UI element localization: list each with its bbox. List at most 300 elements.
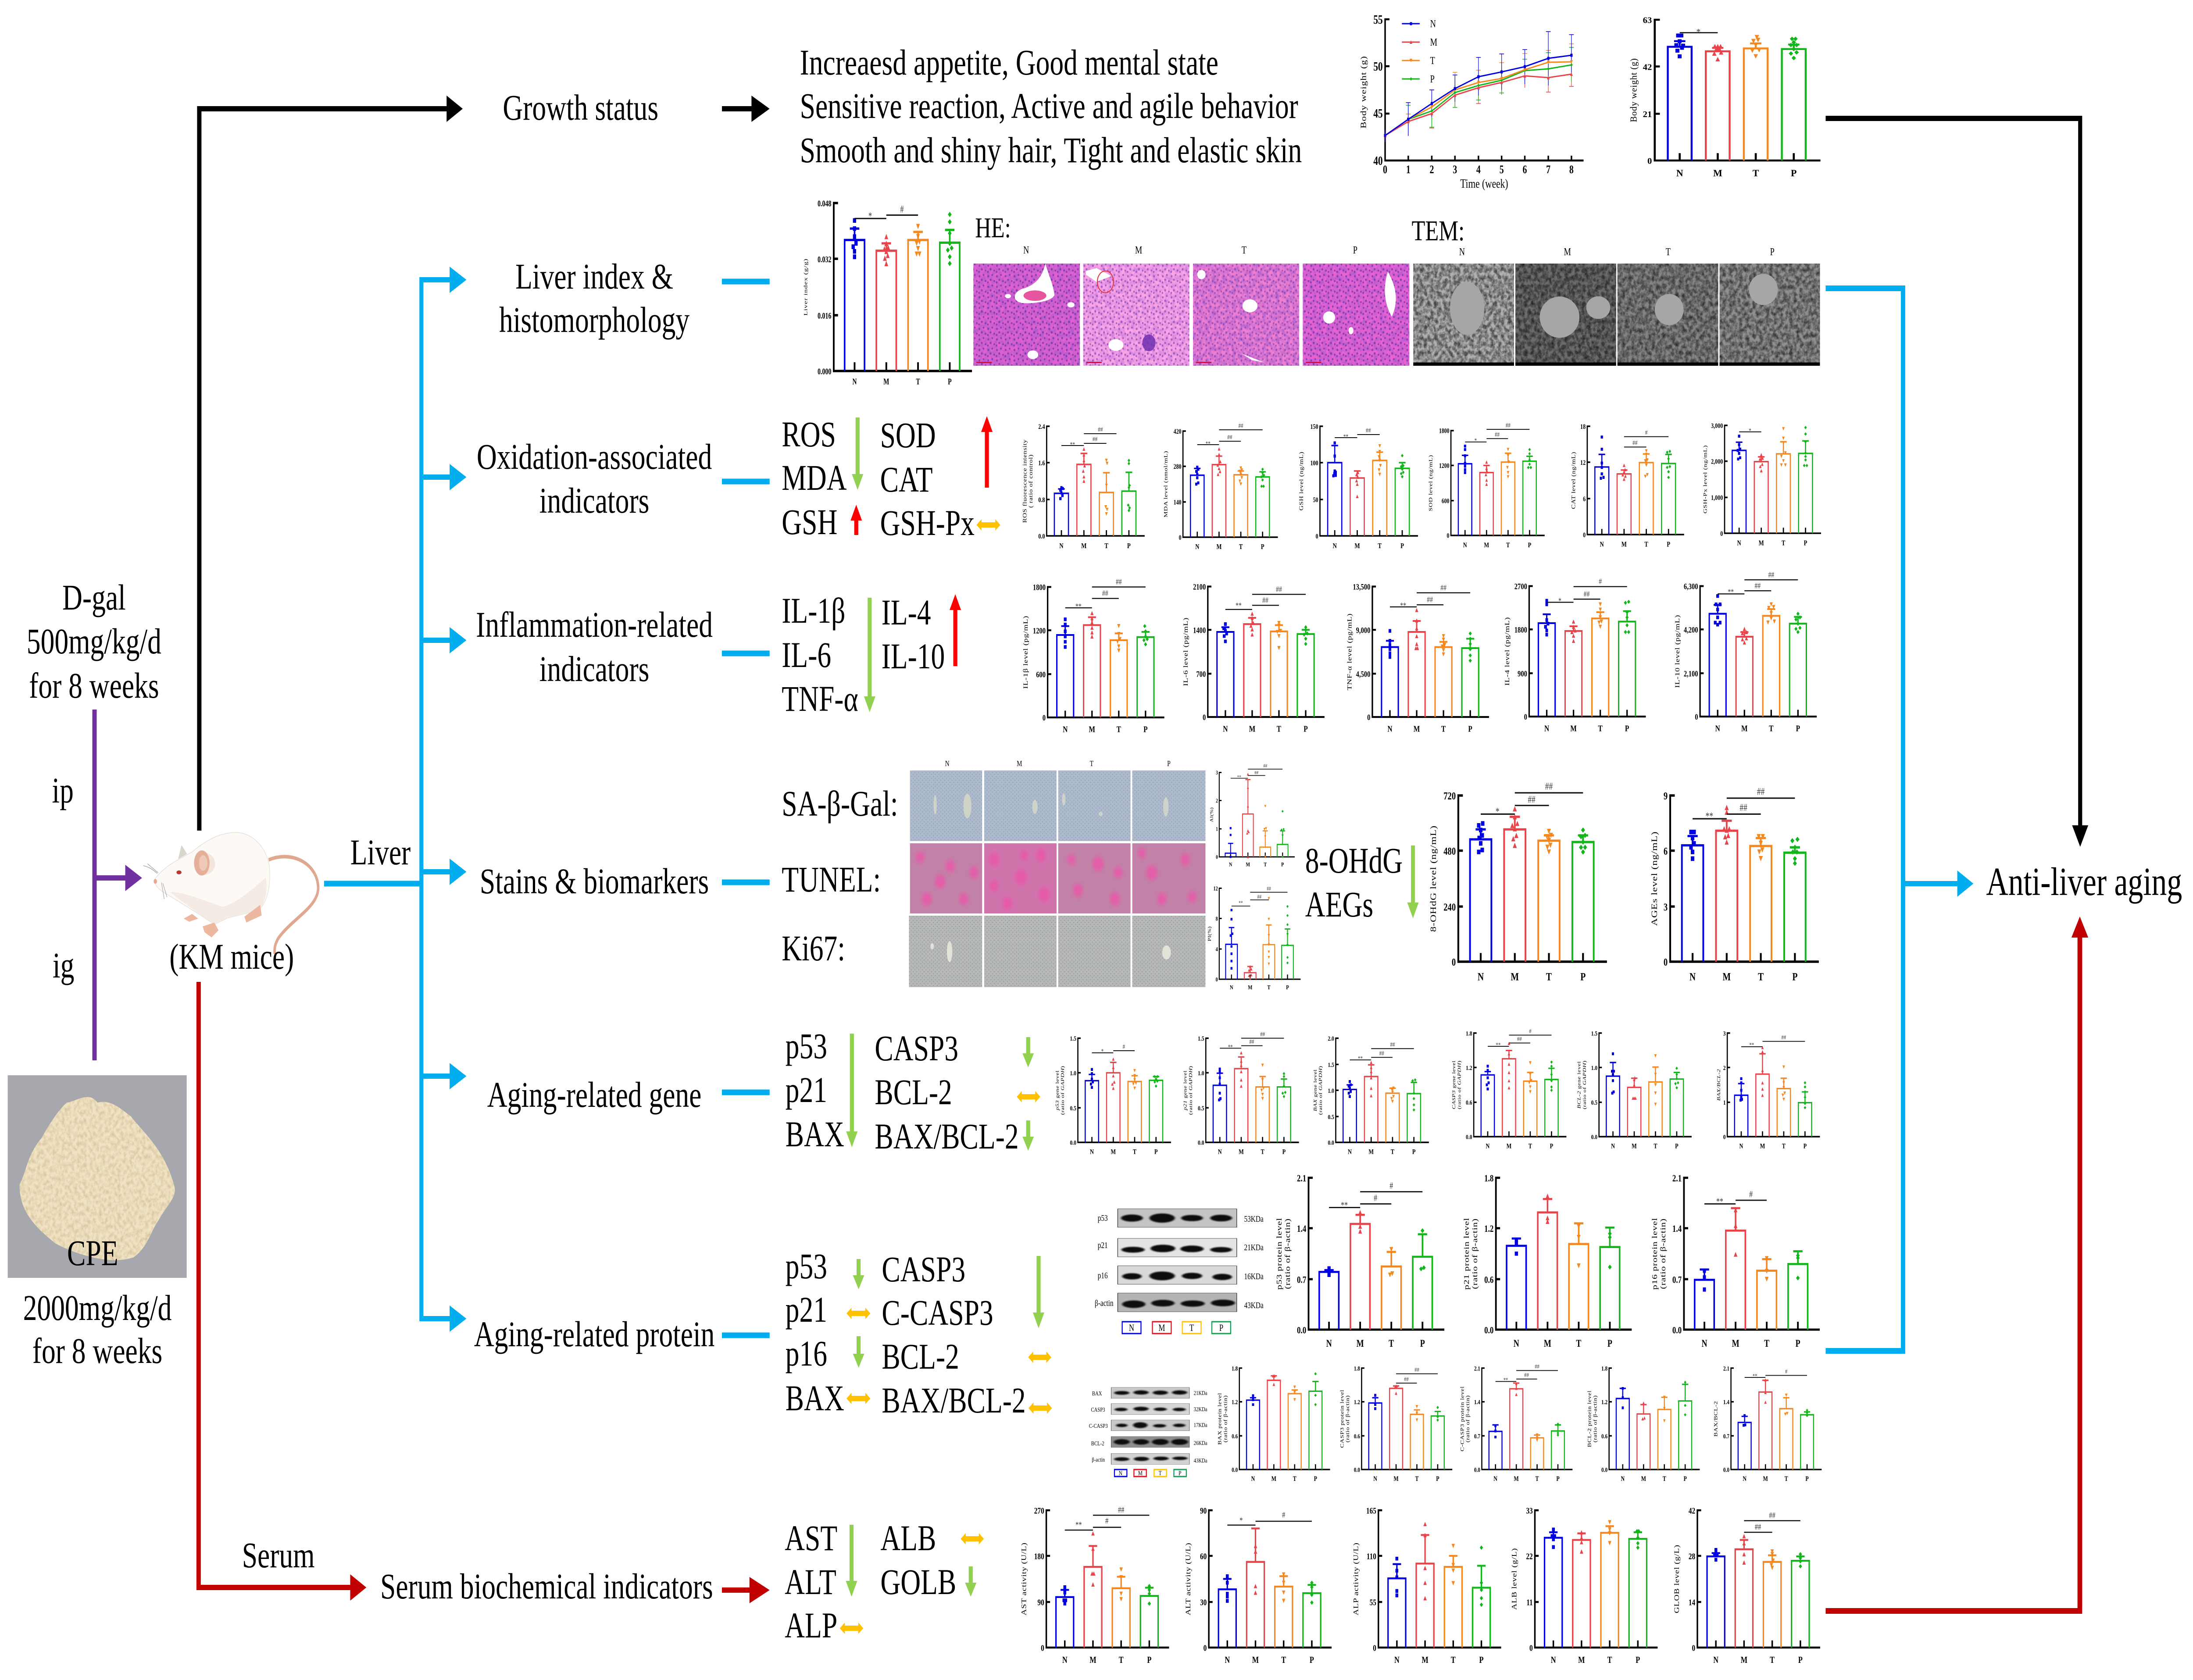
panel: western blot set 1: β-actin (1095, 1298, 1114, 1308)
significance: # (900, 204, 904, 215)
chart: BAX protein: 1.8 (1232, 1365, 1238, 1372)
bars and points (1616, 1382, 1692, 1470)
biomarkers: aging genes: p21 (786, 1070, 827, 1110)
significance: ## (1116, 578, 1122, 586)
significance: ## (1632, 439, 1638, 446)
chart: IL-10: 6,300 (1684, 582, 1698, 591)
significance: ## (1098, 426, 1103, 433)
chart: BCL-2 gene: (ratio of GAPDH) (1582, 1060, 1587, 1109)
significance: ## (1768, 571, 1774, 579)
label: inflammation: Inflammation-related (476, 604, 713, 645)
chart: BAX protein: BAX protein level (1217, 1393, 1222, 1445)
significance: ## (1276, 585, 1282, 594)
significance (1465, 422, 1529, 444)
chart: IL-6 (1182, 582, 1325, 734)
panel: TEM images: P (1770, 246, 1775, 258)
chart: IL-6: IL-6 level (pg/mL) (1182, 617, 1189, 686)
label: liver index: histomorphology (499, 300, 689, 340)
significance (1092, 1043, 1135, 1055)
significance (1624, 428, 1668, 447)
significance: ** (1075, 1520, 1082, 1529)
panel: western blot set 2: CASP3 (1091, 1406, 1105, 1413)
red arrow: serum to outcome (1825, 917, 2088, 1614)
significance: ## (1254, 770, 1258, 776)
significance: * (1558, 597, 1561, 605)
chart: p53 gene: 0.5 (1070, 1104, 1076, 1112)
significance: ** (1206, 439, 1211, 447)
CPE dosing text (23, 1288, 171, 1371)
chart: GSH-Px: 3,000 (1711, 423, 1723, 430)
chart: AI: 1 (1216, 827, 1218, 832)
significance: * (1697, 27, 1700, 36)
chart: MDA: NMTP (1195, 543, 1264, 551)
significance: * (868, 210, 872, 222)
significance: ## (1506, 422, 1511, 429)
bars and points (1057, 613, 1154, 717)
chart: ROS: 1.6 (1038, 460, 1045, 467)
chart: IL-4: 1800 (1514, 625, 1527, 635)
biomarkers: aging proteins: BAX/BCL-2 (882, 1380, 1026, 1420)
chart: AI: 3 (1216, 770, 1218, 776)
biomarkers: inflammation: IL-1β (782, 590, 846, 631)
chart: liver index: 0.000 (818, 367, 832, 376)
significance: ** (1239, 900, 1243, 906)
chart: SOD (1428, 422, 1545, 549)
significance: ** (1341, 1201, 1348, 1211)
significance: ## (1102, 589, 1108, 598)
significance (1481, 781, 1583, 817)
chart: p21 protein: 1.8 (1484, 1173, 1493, 1184)
chart: BAX/BCL-2 gene: 2 (1723, 1064, 1726, 1071)
significance (1488, 1027, 1551, 1048)
significance: # (1374, 1194, 1377, 1203)
significance: ** (1228, 1044, 1233, 1051)
chart: IL-10: 2,100 (1684, 669, 1698, 678)
chart: SOD: NMTP (1463, 541, 1531, 549)
significance (1197, 422, 1263, 447)
chart: BCL-2 protein (1586, 1365, 1700, 1483)
label: aging gene: Aging-related gene (487, 1074, 701, 1115)
chart: IL-10: 0 (1695, 712, 1698, 722)
panel: staining micrographs: M (1017, 760, 1022, 768)
chart: BAX gene: 1.5 (1328, 1061, 1334, 1068)
chart: TNF-α (1346, 582, 1489, 734)
chart: p16 protein: NMTP (1702, 1337, 1800, 1349)
significance: ** (1237, 774, 1241, 780)
CPE dosing text: for 8 weeks (32, 1330, 162, 1371)
chart: BAX/BCL-2 protein: 1.4 (1723, 1398, 1729, 1405)
chart legend: N (1430, 18, 1436, 30)
chart: CASP3 gene: 1.2 (1466, 1064, 1472, 1071)
heading: HE: HE: (975, 212, 1011, 244)
chart: SOD: 1200 (1439, 462, 1450, 469)
significance: # (1599, 578, 1602, 586)
chart: p16 protein: 0.0 (1672, 1325, 1682, 1336)
chart: IL-6: 2100 (1193, 582, 1206, 592)
panel: HE histology images: T (1242, 244, 1247, 256)
chart: p21 gene: 1.0 (1198, 1070, 1204, 1077)
chart: IL-10: IL-10 level (pg/mL) (1674, 615, 1681, 688)
chart: AGEs: 3 (1664, 901, 1668, 913)
chart: BAX/BCL-2 protein: 0.7 (1723, 1432, 1729, 1440)
arrows: serum (840, 1525, 984, 1634)
bars and points (1056, 1534, 1158, 1648)
bars and points (1470, 809, 1594, 962)
chart: liver index (803, 199, 972, 386)
chart: p21 protein: NMTP (1514, 1337, 1612, 1349)
bars and points (1343, 1063, 1421, 1142)
chart: BAX/BCL-2 gene: 3 (1723, 1030, 1726, 1037)
significance: ** (1753, 1373, 1757, 1379)
panel: western blot set 2: C-CASP3 (1089, 1423, 1108, 1429)
significance: ** (1504, 1377, 1508, 1384)
route label: ip: ip (52, 770, 74, 810)
stain row labels: Ki67: (782, 928, 845, 968)
biomarkers: aging proteins: p21 (786, 1289, 827, 1330)
blot legend: M (1158, 1323, 1165, 1334)
bars and points (1218, 1528, 1321, 1648)
chart: BCL-2 protein: 0.6 (1601, 1432, 1607, 1440)
chart: SOD: 600 (1442, 497, 1450, 505)
biomarkers: serum: ALP (785, 1605, 837, 1645)
significance (1496, 1363, 1558, 1384)
chart: BAX gene: 0.0 (1328, 1139, 1334, 1146)
black arrow: mouse to growth status (197, 96, 463, 831)
chart: TNF-α: TNF-α level (pg/mL) (1346, 613, 1353, 690)
blot legend: T (1159, 1470, 1162, 1477)
chart: BAX gene: NMTP (1348, 1148, 1416, 1156)
D-gal dosing text (27, 577, 161, 706)
chart: CASP3 protein: 1.2 (1354, 1398, 1360, 1405)
significance (1335, 427, 1380, 440)
chart: p21 gene (1182, 1031, 1299, 1156)
significance: # (1529, 1027, 1532, 1034)
significance: ## (1093, 435, 1098, 442)
line chart: body weight over time: Body weight (g) (1360, 56, 1368, 128)
significance (1739, 427, 1761, 434)
significance (1227, 1510, 1312, 1525)
significance: ## (1781, 1034, 1786, 1041)
chart: ALB: 33 (1526, 1506, 1533, 1516)
significance: ** (1075, 603, 1082, 611)
chart: p21 protein: 0.6 (1484, 1274, 1493, 1285)
chart legend: T (1430, 55, 1435, 67)
significance: ## (1769, 1511, 1775, 1520)
black arrow: growth to outcome (1825, 116, 2088, 847)
biomarkers: inflammation: IL-6 (782, 635, 831, 675)
arrow: biomarkers down (1407, 845, 1419, 918)
chart: IL-1β: 0 (1043, 713, 1046, 723)
significance: ## (1238, 422, 1243, 429)
chart: BCL-2 protein: NMTP (1621, 1476, 1687, 1483)
significance (1065, 1505, 1149, 1530)
chart: liver index: 0.032 (818, 254, 832, 264)
chart: BAX protein (1217, 1365, 1330, 1483)
chart: C-CASP3 protein: 0.7 (1474, 1432, 1480, 1440)
chart: ALT: 60 (1200, 1551, 1207, 1561)
chart: p53 gene: (ratio of GAPDH) (1060, 1066, 1065, 1115)
significance (1329, 1181, 1422, 1211)
chart: p21 protein: 0.0 (1484, 1325, 1493, 1336)
chart: SOD: SOD level (ng/mL) (1428, 455, 1434, 511)
chart: liver index: Liver index (g/g) (803, 258, 809, 316)
chart: BCL-2 gene: 0.0 (1591, 1133, 1597, 1141)
chart: body weight bars: 21 (1643, 110, 1652, 119)
significance: # (1785, 1368, 1787, 1375)
chart: ROS: 0.8 (1038, 496, 1045, 504)
bars and points (1709, 596, 1806, 717)
chart: CASP3 protein: 1.8 (1354, 1365, 1360, 1372)
biomarkers: inflammation (782, 590, 945, 719)
chart: TNF-α: 0 (1367, 713, 1370, 722)
chart: p21 gene: 0.0 (1198, 1139, 1204, 1146)
blue branching tree (419, 267, 466, 1332)
chart: CASP3 gene: CASP3 gene level (1451, 1060, 1457, 1109)
chart: p21 protein: p21 protein level (1463, 1218, 1471, 1290)
chart: MDA (1163, 422, 1278, 551)
chart: BAX gene: 1.0 (1328, 1087, 1334, 1094)
bars and points (1213, 1053, 1291, 1142)
chart: BAX/BCL-2 gene: NMTP (1739, 1142, 1807, 1150)
bars and points (1507, 1196, 1620, 1330)
bars and points (1190, 449, 1269, 537)
significance (1390, 584, 1470, 610)
biomarkers: serum: ALB (880, 1518, 936, 1558)
chart: p53 gene: 1.5 (1070, 1035, 1076, 1042)
chart: GSH-Px: 1,000 (1711, 495, 1723, 502)
chart: C-CASP3 protein (1459, 1363, 1572, 1483)
chart: 8-OHdG: 720 (1443, 790, 1456, 802)
panel: HE histology images: M (1135, 244, 1142, 256)
significance: ## (1263, 763, 1267, 769)
significance (854, 204, 918, 222)
chart: GLOB (1673, 1506, 1820, 1666)
bars and points (1225, 774, 1288, 857)
chart: CASP3 protein: CASP3 protein level (1339, 1390, 1345, 1448)
bars and points (1606, 1054, 1683, 1137)
panel: western blot set 2: 17KDa (1194, 1422, 1207, 1428)
liver label: Liver (350, 832, 411, 872)
chart: BAX/BCL-2 protein (1713, 1365, 1822, 1483)
chart: p16 protein: p16 protein level (1650, 1218, 1659, 1290)
significance (1065, 578, 1146, 611)
chart: p21 gene: 1.5 (1198, 1035, 1204, 1042)
label: liver index (499, 256, 689, 340)
chart: CASP3 gene: 0.0 (1466, 1133, 1472, 1141)
chart: MDA: MDA level (nmol/mL) (1163, 451, 1169, 517)
CPE label: CPE (67, 1233, 118, 1273)
biomarkers: serum: GOLB (880, 1562, 956, 1602)
chart: ALP: NMTP (1394, 1655, 1484, 1666)
photo: CPE powder (8, 1075, 187, 1278)
icon: mouse (143, 832, 318, 954)
bars and points (1388, 1524, 1490, 1648)
significance: # (1123, 1043, 1125, 1050)
chart: GLOB: 42 (1689, 1506, 1695, 1516)
biomarkers: oxidation: GSH-Px (880, 503, 975, 543)
panel: western blot set 2: 32KDa (1194, 1406, 1207, 1412)
significance: ** (1728, 588, 1734, 596)
chart: GLOB: GLOB level (g/L) (1673, 1544, 1681, 1613)
chart: p53 gene (1054, 1035, 1171, 1156)
biomarkers: inflammation: TNF-α (782, 678, 858, 719)
chart: AI (1210, 763, 1295, 868)
chart: BAX gene: 0.5 (1328, 1113, 1334, 1120)
chart: body weight bars: 42 (1643, 62, 1652, 72)
chart: p53 protein: p53 protein level (1275, 1218, 1283, 1290)
chart: BAX gene (1312, 1035, 1429, 1156)
chart: p21 protein: 1.2 (1484, 1223, 1493, 1234)
biomarkers: serum: ALT (785, 1562, 836, 1602)
chart: CASP3 protein: NMTP (1373, 1476, 1439, 1483)
chart: BAX/BCL-2 gene: BAX/BCL-2 (1716, 1069, 1722, 1101)
chart: IL-6: 0 (1203, 713, 1206, 722)
significance (1693, 786, 1795, 822)
chart: C-CASP3 protein: (ratio of β-actin) (1465, 1395, 1471, 1442)
chart: p53 protein: NMTP (1326, 1337, 1425, 1349)
chart: CASP3 gene: NMTP (1486, 1142, 1553, 1150)
chart: CAT: 18 (1580, 423, 1586, 431)
chart: body weight bars: Body weight (g) (1629, 58, 1639, 122)
chart: ROS (1022, 423, 1145, 550)
chart: AGEs (1650, 786, 1819, 983)
chart: ALT (1184, 1506, 1332, 1666)
chart: AST: NMTP (1062, 1655, 1152, 1666)
significance: ## (1379, 1050, 1384, 1057)
bars and points (1369, 1386, 1444, 1470)
bars and points (1682, 807, 1806, 962)
significance (1350, 1041, 1414, 1062)
significance: * (1239, 1516, 1243, 1525)
chart: BAX/BCL-2 protein: NMTP (1743, 1476, 1809, 1483)
biomarkers: aging genes (786, 1026, 1019, 1156)
significance (1744, 1511, 1800, 1532)
panel: western blot set 2: 21KDa (1194, 1390, 1207, 1396)
panel: western blot set 1: 53KDa (1244, 1214, 1264, 1223)
chart: TNF-α: 9,000 (1356, 626, 1370, 635)
stain row labels (782, 783, 898, 968)
chart: p21 gene: NMTP (1218, 1148, 1286, 1156)
chart: AST: 180 (1034, 1551, 1044, 1561)
chart: liver index: 0.048 (818, 199, 832, 208)
chart: BAX/BCL-2 protein: 0.0 (1723, 1466, 1729, 1473)
chart: IL-4 (1504, 578, 1646, 733)
text: growth observations (800, 42, 1302, 170)
chart: 8-OHdG: 480 (1443, 845, 1456, 857)
significance: ## (1517, 1035, 1522, 1042)
stain row labels: SA-β-Gal: (782, 783, 898, 824)
panel: HE histology images: P (1353, 244, 1357, 256)
chart: ALB: NMTP (1551, 1655, 1640, 1666)
biomarkers: aging proteins: C-CASP3 (882, 1292, 993, 1333)
heading: TEM: TEM: (1411, 215, 1464, 247)
panel: western blot set 1: p53 (1098, 1213, 1108, 1223)
mouse label: (KM mice) (169, 936, 294, 977)
short arrow: growth (722, 96, 770, 122)
chart: GSH-Px (1703, 423, 1821, 547)
chart: ALP (1352, 1506, 1501, 1666)
bars and points (1707, 1536, 1809, 1648)
chart: CASP3 protein: 0.6 (1354, 1432, 1360, 1440)
chart: AI: NMTP (1229, 861, 1284, 868)
panel: TEM images: M (1564, 246, 1571, 258)
significance (1745, 1368, 1807, 1379)
stain row labels: TUNEL: (782, 859, 881, 899)
line chart: body weight over time: 40 (1373, 154, 1383, 168)
chart: CAT: 6 (1583, 495, 1586, 503)
significance: ## (1262, 596, 1268, 605)
significance: * (1101, 1048, 1104, 1055)
chart: BCL-2 gene: 0.5 (1591, 1099, 1597, 1106)
biomarkers: oxidation: ROS (782, 414, 836, 454)
chart: ROS: ( ratio of control) (1028, 454, 1034, 508)
significance (1231, 763, 1282, 780)
chart: p21 gene: p21 gene level (1182, 1070, 1188, 1110)
chart: PI: 12 (1213, 885, 1218, 892)
blot legend: P (1179, 1470, 1181, 1477)
biomarkers: aging proteins: BAX (786, 1378, 844, 1418)
significance: ## (1757, 786, 1764, 797)
chart: CASP3 gene (1451, 1027, 1566, 1150)
chart: BCL-2 protein: BCL-2 protein level (1586, 1391, 1592, 1447)
serum label: Serum (242, 1535, 315, 1575)
significance (1704, 1190, 1767, 1207)
blot legend: N (1119, 1470, 1122, 1477)
chart legend: P (1430, 73, 1435, 85)
chart: GSH-Px: GSH-Px level (ng/mL) (1703, 445, 1708, 514)
panel: TEM images: T (1666, 246, 1671, 258)
chart: p53 gene: p53 gene level (1054, 1070, 1060, 1110)
chart: p21 protein (1463, 1173, 1632, 1349)
chart: AI: 0 (1216, 855, 1218, 860)
chart: PI: NMTP (1230, 984, 1289, 991)
chart: SOD: 1800 (1439, 427, 1450, 435)
chart: BCL-2 protein: 1.8 (1601, 1365, 1607, 1372)
chart: IL-1β: 1200 (1033, 626, 1046, 635)
chart: GSH: GSH level (ng/mL) (1299, 452, 1305, 510)
chart: BAX/BCL-2 gene (1716, 1030, 1820, 1150)
chart: ALB: 22 (1526, 1551, 1533, 1561)
arrows: oxidation (850, 416, 1000, 535)
chart: ALP: 110 (1367, 1551, 1376, 1561)
chart: GSH-Px: 2,000 (1711, 458, 1723, 466)
chart: IL-4: 900 (1518, 669, 1527, 678)
text: growth observations: Sensitive reaction, Active and agile behavior (800, 86, 1298, 126)
chart: BCL-2 gene: 1.0 (1591, 1064, 1597, 1071)
chart: p53 protein: 0.7 (1297, 1274, 1306, 1285)
D-gal dosing text: for 8 weeks (29, 665, 159, 706)
blue bracket and arrow: liver to outcome (1825, 285, 1973, 1354)
chart: CAT: NMTP (1600, 541, 1670, 549)
significance (1718, 571, 1798, 596)
chart: BCL-2 protein: 1.2 (1601, 1398, 1607, 1405)
line chart: body weight over time: 55 (1373, 13, 1383, 27)
label: stains: Stains & biomarkers (480, 861, 709, 901)
chart: BAX protein: (ratio of β-actin) (1222, 1395, 1228, 1442)
chart: ALP: 165 (1366, 1506, 1376, 1516)
chart: AGEs: 6 (1664, 845, 1668, 857)
chart: ALT: 90 (1200, 1506, 1207, 1516)
CPE dosing text: 2000mg/kg/d (23, 1288, 171, 1328)
chart: CAT: 12 (1580, 459, 1586, 467)
chart: TNF-α: 13,500 (1353, 582, 1370, 592)
line chart: body weight over time: 45 (1373, 107, 1383, 121)
biomarkers: aging genes: p53 (786, 1026, 827, 1066)
chart: SOD: 0 (1447, 532, 1450, 539)
bars and points (1085, 1059, 1163, 1142)
biomarkers: oxidation: MDA (782, 457, 847, 498)
biomarkers: aging proteins: p53 (786, 1246, 827, 1286)
